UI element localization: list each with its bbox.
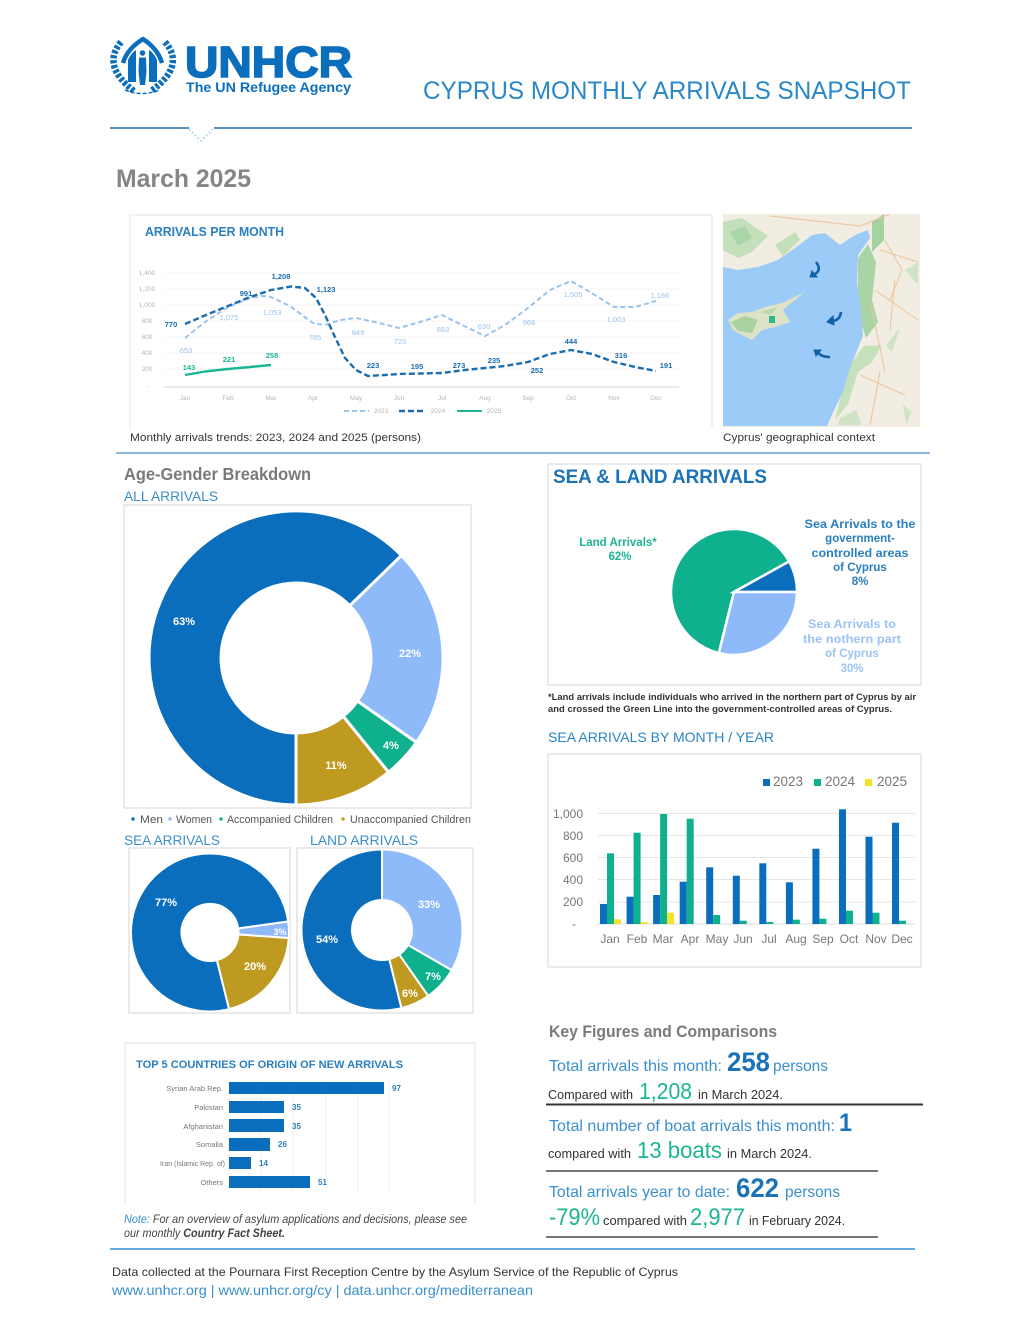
- figure: total arrivals year to date: persons: [785, 1184, 840, 1201]
- figure: total arrivals year to date: 2,977: [690, 1204, 745, 1231]
- land donut labels: 54%: [316, 934, 338, 946]
- figure: total arrivals year to date: 622: [736, 1173, 779, 1203]
- data labels 2023: 785: [309, 333, 321, 342]
- key figures heading: Key Figures and Comparisons: [549, 1022, 777, 1041]
- donut legend: Men: [140, 814, 163, 826]
- y axis labels: 400: [142, 350, 153, 357]
- month labels: May: [706, 932, 728, 946]
- bar values: 14: [259, 1159, 268, 1168]
- data labels 2023: 849: [352, 328, 364, 337]
- y axis labels: 1,000: [553, 807, 583, 821]
- label: land arrivals: [579, 537, 657, 563]
- top 5 heading: TOP 5 COUNTRIES OF ORIGIN OF NEW ARRIVALS: [136, 1059, 403, 1071]
- figure: boat arrivals: 1: [839, 1109, 852, 1137]
- chart legend: 2025: [487, 408, 502, 415]
- sea donut labels: 20%: [244, 961, 266, 973]
- bar values: 26: [278, 1140, 287, 1149]
- data labels 2024: 273: [453, 361, 465, 370]
- line: 2025: [185, 365, 271, 375]
- sea donut labels: 3%: [273, 927, 287, 937]
- month labels: Sep: [812, 932, 834, 946]
- bar legend: 2023: [773, 773, 803, 789]
- figure: boat arrivals: compared with: [548, 1146, 631, 1161]
- figure: total arrivals year to date: [549, 1173, 845, 1231]
- label: sea arrivals northern part: Sea Arrivals to: [808, 619, 896, 631]
- donut labels: [173, 616, 421, 772]
- bar values: 51: [318, 1178, 327, 1187]
- figure: boat arrivals: in March 2024.: [727, 1146, 812, 1161]
- panel: sea and land arrivals pie chart: [548, 464, 921, 685]
- figure: total arrivals this month: [548, 1047, 828, 1104]
- country labels: Pakistan: [194, 1103, 223, 1112]
- label: sea arrivals government-controlled: [804, 519, 916, 588]
- map: Cyprus geographical context: [723, 214, 920, 427]
- figure: total arrivals year to date: -79%: [549, 1204, 600, 1231]
- panel: top 5 countries of origin bar chart: [125, 1043, 475, 1203]
- label: sea arrivals northern part: [803, 619, 901, 675]
- month labels: [600, 932, 913, 946]
- figure: total arrivals this month: Compared with: [548, 1087, 633, 1102]
- data labels 2025: 258: [266, 351, 278, 360]
- data labels 2024: 1,208: [272, 272, 290, 281]
- footer: data source: Data collected at the Pournara First Reception Centre by the Asylum Service of the Republic of Cyprus: [112, 1265, 678, 1279]
- label: land arrivals: 62%: [608, 551, 632, 563]
- x axis labels: Oct: [566, 395, 576, 402]
- x axis labels: Jun: [394, 395, 405, 402]
- bars 2023: [600, 809, 899, 924]
- label: sea arrivals government-controlled: of Cyprus: [833, 562, 887, 574]
- month labels: Nov: [865, 932, 887, 946]
- y axis labels: 200: [142, 366, 153, 373]
- month labels: Oct: [840, 932, 859, 946]
- month labels: Mar: [653, 932, 673, 946]
- x axis labels: Jan: [180, 395, 191, 402]
- donut legend: Accompanied Children: [227, 814, 333, 826]
- figure: total arrivals this month: 1,208: [639, 1078, 692, 1104]
- y axis labels: 800: [142, 318, 153, 325]
- label: sea arrivals northern part: the nothern part: [803, 634, 901, 646]
- month labels: Jan: [600, 932, 620, 946]
- data labels 2024: 235: [488, 356, 500, 365]
- figure: total arrivals this month: persons: [773, 1058, 828, 1075]
- month labels: Jun: [733, 932, 753, 946]
- arrow: from north: [810, 262, 819, 277]
- x axis labels: [180, 395, 663, 402]
- figure: boat arrivals: [548, 1109, 852, 1163]
- figure: total arrivals year to date: compared with: [603, 1213, 687, 1228]
- data labels 2024: 444: [565, 337, 578, 346]
- panel: arrivals per month line chart: [130, 215, 712, 428]
- bars 2025: [614, 913, 674, 924]
- line: 2023: [185, 281, 656, 338]
- data labels 2024: 770: [165, 320, 177, 329]
- logo wordmark: UNHCR: [185, 38, 352, 87]
- country labels: Iran (Islamic Rep. of): [160, 1161, 225, 1168]
- footer: links: www.unhcr.org | www.unhcr.org/cy | data.unhcr.org/mediterranean: [111, 1283, 533, 1298]
- land donut labels: 7%: [425, 971, 441, 983]
- note: our monthly Country Fact Sheet.: [124, 1228, 285, 1240]
- y axis labels: 600: [142, 334, 153, 341]
- panel: sea arrivals donut chart: [129, 848, 290, 1013]
- y axis labels: -: [146, 383, 148, 390]
- label: sea arrivals government-controlled: 8%: [852, 576, 868, 588]
- data labels 2024: 991: [240, 289, 252, 298]
- data labels 2023: 1,166: [651, 291, 669, 300]
- panel: key figures and comparisons: [546, 1022, 923, 1237]
- country labels: [160, 1084, 225, 1187]
- y axis labels: 800: [563, 829, 583, 843]
- x axis labels: Sep: [522, 395, 534, 402]
- panel: all arrivals donut chart: [124, 505, 471, 808]
- data labels 2024: 316: [615, 351, 627, 360]
- bar values: 97: [392, 1084, 401, 1093]
- y axis labels: 600: [563, 851, 583, 865]
- y axis labels: 1,200: [139, 286, 156, 293]
- data labels 2023: [180, 290, 669, 355]
- data labels 2023: 1,075: [220, 313, 238, 322]
- y axis labels: 200: [563, 895, 583, 909]
- icon: UNHCR emblem: [113, 39, 173, 94]
- heading: all arrivals: ALL ARRIVALS: [124, 488, 218, 504]
- data labels 2025: [183, 351, 278, 372]
- footnote: and crossed the Green Line into the government-controlled areas of Cyprus.: [548, 704, 892, 714]
- sea donut labels: 77%: [155, 897, 177, 909]
- note: [124, 1214, 467, 1240]
- figure: total arrivals this month: Total arrivals this month:: [549, 1058, 722, 1075]
- logo tagline: The UN Refugee Agency: [186, 80, 352, 95]
- figure: boat arrivals: 13 boats: [637, 1137, 722, 1163]
- land donut labels: 6%: [402, 988, 418, 1000]
- donut legend: Unaccompanied Children: [350, 814, 471, 826]
- pie chart: [671, 529, 797, 655]
- month labels: Feb: [627, 932, 648, 946]
- country labels: Somalia: [196, 1140, 224, 1149]
- label: sea arrivals government-controlled: Sea Arrivals to the: [804, 519, 916, 531]
- figure: total arrivals this month: 258: [727, 1047, 770, 1077]
- pie heading: SEA & LAND ARRIVALS: [553, 467, 767, 488]
- footnote: [548, 692, 917, 714]
- arrow: from east: [827, 312, 841, 325]
- figure: total arrivals year to date: in February 2024.: [749, 1213, 845, 1228]
- month labels: Jul: [761, 932, 777, 946]
- chart legend: 2024: [431, 408, 446, 415]
- bar values: 35: [292, 1122, 301, 1131]
- x axis labels: Jul: [438, 395, 447, 402]
- bar legend: 2024: [825, 773, 855, 789]
- x axis labels: Nov: [608, 395, 621, 402]
- country labels: Others: [200, 1178, 223, 1187]
- line: 2024: [185, 286, 656, 376]
- y axis labels: 1,400: [139, 270, 156, 277]
- donut labels: 11%: [325, 760, 347, 772]
- arrow: from south-east: [814, 350, 830, 357]
- label: land arrivals: Land Arrivals*: [579, 537, 657, 549]
- data labels 2024: [165, 272, 672, 375]
- land donut labels: [316, 899, 441, 1000]
- chart caption: Monthly arrivals trends: 2023, 2024 and 2025 (persons): [130, 432, 421, 444]
- label: sea arrivals northern part: 30%: [840, 663, 864, 675]
- bars: [229, 1082, 384, 1188]
- donut labels: 4%: [383, 740, 399, 752]
- y axis labels: 1,000: [139, 302, 156, 309]
- bar legend: [763, 773, 907, 789]
- data labels 2023: 883: [437, 325, 449, 334]
- heading: sea arrivals by month: SEA ARRIVALS BY MONTH / YEAR: [548, 729, 774, 745]
- data labels 2023: 653: [180, 346, 192, 355]
- label: sea arrivals northern part: of Cyprus: [825, 648, 879, 660]
- date heading: March 2025: [116, 165, 251, 193]
- map caption: Cyprus' geographical context: [723, 432, 875, 444]
- figure: boat arrivals: Total number of boat arrivals this month:: [549, 1118, 835, 1135]
- data labels 2023: 968: [523, 318, 535, 327]
- y axis labels: -: [572, 917, 576, 931]
- y axis labels: [139, 270, 156, 390]
- heading: sea arrivals: SEA ARRIVALS: [124, 832, 220, 848]
- heading: land arrivals: LAND ARRIVALS: [310, 832, 418, 848]
- x axis labels: Apr: [308, 395, 319, 402]
- data labels 2024: 1,123: [317, 285, 335, 294]
- donut labels: 22%: [399, 648, 421, 660]
- x axis labels: Feb: [222, 395, 234, 402]
- x axis labels: Aug: [479, 395, 491, 402]
- figure: total arrivals this month: in March 2024.: [698, 1087, 783, 1102]
- data labels 2025: 143: [183, 363, 195, 372]
- data labels 2024: 223: [367, 361, 379, 370]
- bar values: 35: [292, 1103, 301, 1112]
- label: sea arrivals government-controlled: government-: [825, 533, 895, 545]
- month labels: Apr: [681, 932, 699, 946]
- figure: total arrivals year to date: Total arrivals year to date:: [549, 1184, 730, 1201]
- panel: sea arrivals by month bar chart: [548, 754, 921, 967]
- UNHCR logo: [113, 38, 352, 95]
- chart heading: ARRIVALS PER MONTH: [145, 224, 284, 239]
- chart legend: [344, 408, 502, 415]
- data labels 2023: 1,505: [564, 290, 582, 299]
- heading: age-gender breakdown: Age-Gender Breakdown: [124, 464, 311, 484]
- country labels: Afghanistan: [183, 1122, 223, 1131]
- data labels 2024: 191: [660, 361, 672, 370]
- bar values: [259, 1084, 401, 1187]
- month labels: Aug: [785, 932, 807, 946]
- sea donut labels: [155, 897, 287, 973]
- label: sea arrivals government-controlled: controlled areas: [812, 548, 908, 560]
- donut legend: [131, 814, 471, 826]
- footnote: *Land arrivals include individuals who arrived in the northern part of Cyprus by air: [548, 692, 917, 702]
- title: CYPRUS MONTHLY ARRIVALS SNAPSHOT: [423, 77, 911, 105]
- donut labels: 63%: [173, 616, 195, 628]
- data labels 2023: 630: [478, 322, 490, 331]
- bars 2024: [607, 814, 906, 924]
- data labels 2025: 221: [223, 355, 235, 364]
- x axis labels: Dec: [650, 395, 663, 402]
- data labels 2023: 1,053: [263, 308, 281, 317]
- data labels 2024: 252: [531, 366, 543, 375]
- y axis labels: 400: [563, 873, 583, 887]
- land donut labels: 33%: [418, 899, 440, 911]
- x axis labels: Mar: [265, 395, 277, 402]
- map: Cyprus island: [728, 292, 805, 340]
- chart legend: 2023: [374, 408, 389, 415]
- month labels: Dec: [891, 932, 913, 946]
- donut legend: Women: [176, 814, 212, 826]
- y axis labels: [553, 807, 583, 931]
- x axis labels: May: [350, 395, 363, 402]
- data labels 2024: 195: [411, 362, 423, 371]
- data labels 2023: 1,003: [607, 315, 625, 324]
- note: Note: For an overview of asylum applications and decisions, please see: [124, 1214, 467, 1226]
- country labels: Syrian Arab Rep.: [166, 1084, 223, 1093]
- bar legend: 2025: [877, 773, 907, 789]
- data labels 2023: 725: [394, 337, 406, 346]
- panel: land arrivals donut chart: [297, 848, 473, 1013]
